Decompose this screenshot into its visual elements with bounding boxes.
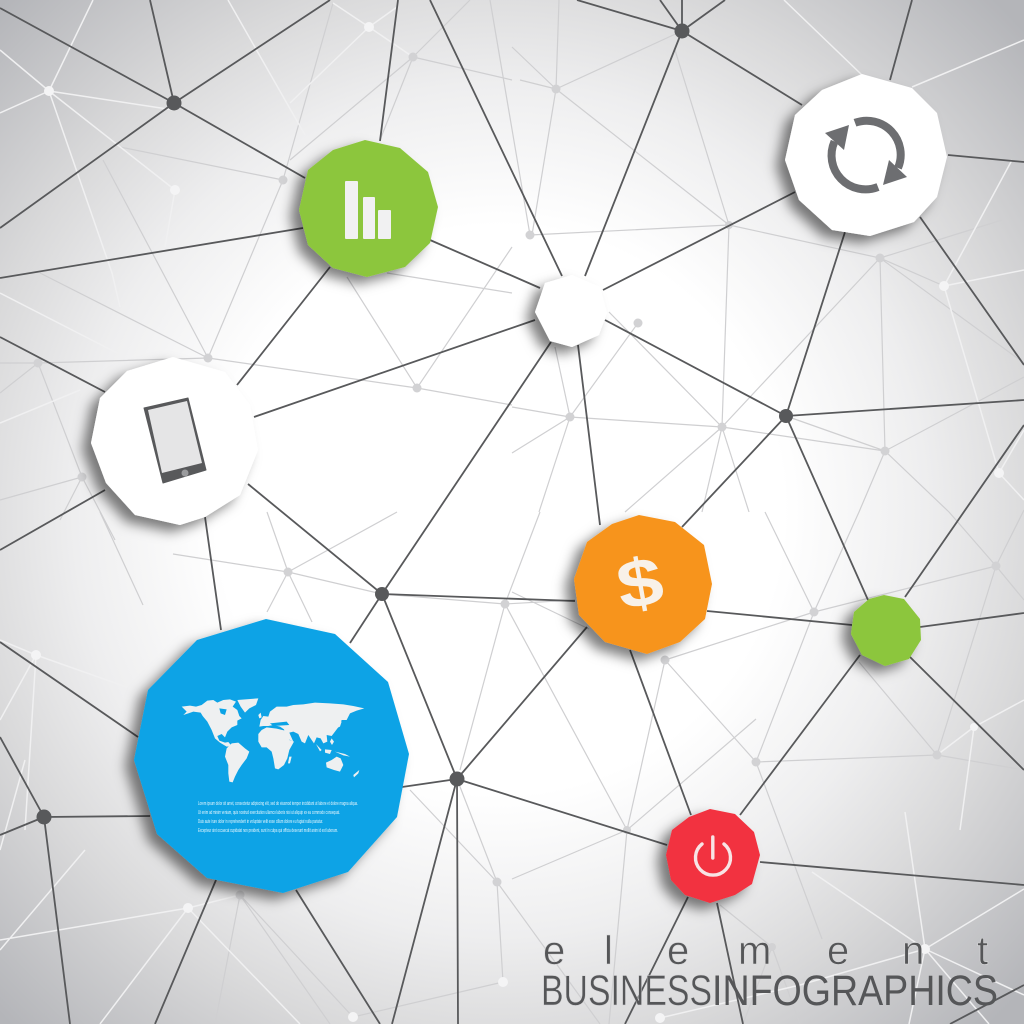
panel: green chart node	[299, 140, 438, 277]
lorem ipsum text: Lorem ipsum dolor sit amet, consectetur adipiscing elit, sed do eiusmod tempor incididunt ut labore et dolore magna aliqua.	[198, 801, 358, 807]
icon: bar chart	[345, 181, 391, 239]
lorem ipsum text: Excepteur sint occaecat cupidatat non proident, sunt in culpa qui officia deserunt mollit anim id est laborum.	[198, 828, 338, 834]
icon: dollar sign: $	[611, 541, 669, 624]
panel: red power node	[666, 809, 760, 903]
panel: small green node	[851, 595, 921, 666]
panel: orange dollar node	[574, 515, 712, 654]
subtitle: element: element	[543, 929, 988, 973]
lorem ipsum text	[198, 801, 358, 834]
dark network nodes	[36, 24, 793, 824]
title	[541, 929, 998, 1015]
world map	[182, 698, 364, 782]
icon: refresh arrows	[825, 121, 907, 189]
icon: smartphone	[144, 398, 206, 483]
panel: white refresh node	[785, 74, 947, 236]
lorem ipsum text: Duis aute irure dolor in reprehenderit in voluptate velit esse cillum dolore eu fugiat nulla pariatur.	[198, 819, 323, 825]
panel: blue world map card	[134, 619, 409, 893]
panel: white phone node	[91, 357, 258, 525]
lorem ipsum text: Ut enim ad minim veniam, quis nostrud exercitation ullamco laboris nisi ut aliquip ex ea commodo consequat.	[198, 810, 340, 816]
panel: white centre node	[535, 275, 607, 347]
heading: business infographics: BUSINESS	[541, 967, 712, 1015]
icon: power symbol	[696, 837, 731, 875]
